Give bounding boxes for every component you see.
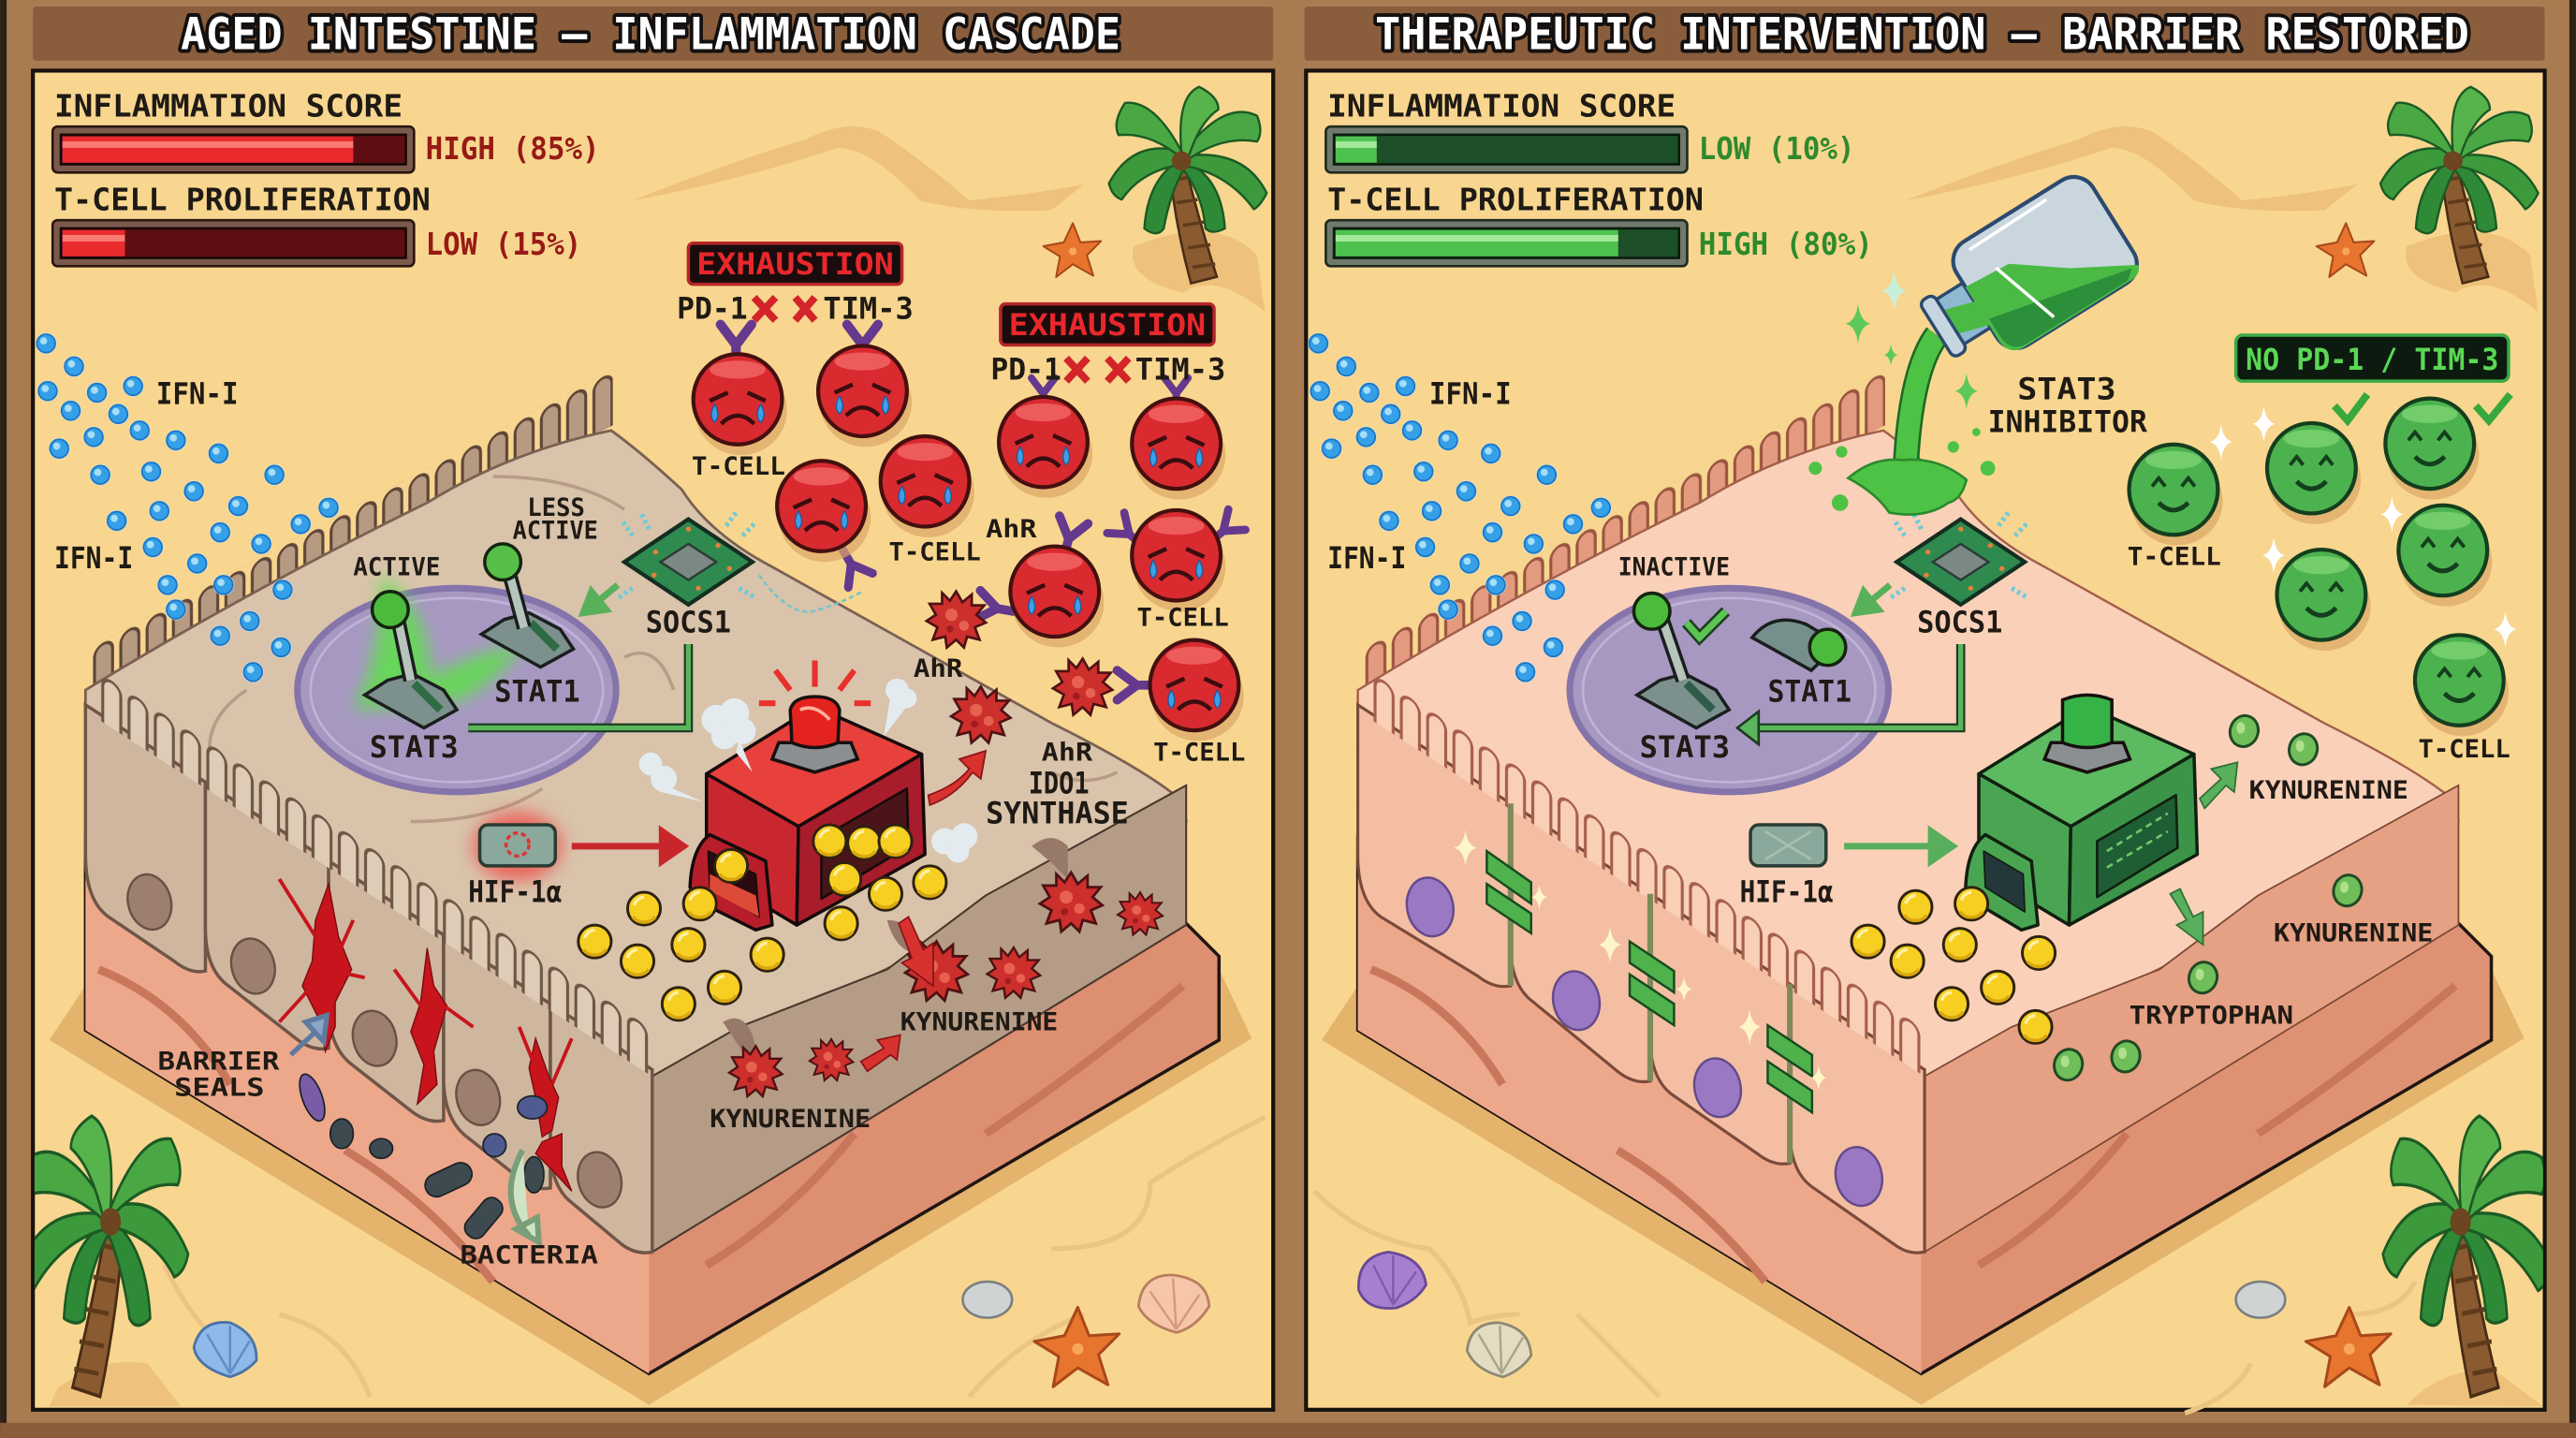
check mark (1687, 611, 1726, 638)
heading bar: aged intestine: AGED INTESTINE – INFLAMMATION CASCADE (181, 9, 1120, 61)
inhibitor bottle (1904, 169, 2145, 382)
labels left: T-CELL (1137, 605, 1229, 633)
kynurenine spikes (729, 873, 1163, 1096)
labels left: BARRIER (158, 1049, 280, 1077)
shell beige (1467, 1323, 1531, 1377)
red synthase machine (690, 707, 925, 930)
output arrows right (2170, 762, 2237, 945)
shell blue (194, 1322, 256, 1377)
T-cell proliferation bar right: T-CELL PROLIFERATION (1327, 182, 1704, 218)
exhaustion badge 2 (1001, 304, 1214, 345)
lever STAT3 active (353, 575, 526, 727)
seal sparkles (1454, 829, 1826, 1091)
labels right: SOCS1 (1917, 607, 2002, 640)
labels right: IFN-I (1327, 542, 1406, 576)
barrier seals (1486, 851, 1812, 1112)
checkpoint labels 2: PD-1 (990, 353, 1061, 387)
T-cell proliferation bar right: HIGH (80%) (1699, 226, 1873, 262)
pale sparkle (1881, 271, 1907, 311)
labels left: IDO1 (1029, 768, 1090, 801)
labels left: STAT1 (494, 675, 580, 709)
bacteria (295, 1071, 547, 1242)
checkpoint labels 1: TIM-3 (823, 292, 914, 326)
panel: aged intestine (19, 5, 1275, 1410)
labels left: HIF-1α (468, 876, 562, 910)
palm tree bottom (19, 1116, 188, 1397)
output arrows (861, 751, 986, 1071)
rock grey (963, 1282, 1012, 1318)
labels right: KYNURENINE (2274, 920, 2433, 948)
labels right: STAT3 (1640, 731, 1730, 765)
check marks (2334, 394, 2510, 420)
lever STAT1 off (1752, 620, 1846, 670)
labels left: SEALS (174, 1075, 265, 1103)
labels left: T-CELL (692, 453, 785, 481)
palm tree top (1109, 87, 1266, 284)
inflammation score bar: HIGH (85%) (426, 130, 600, 167)
check mark inner (1687, 611, 1726, 638)
signal line right (1759, 644, 1961, 727)
no PD-1 badge (2236, 335, 2509, 381)
labels right: T-CELL (2418, 736, 2510, 764)
T-cell proliferation bar: T-CELL PROLIFERATION (54, 182, 431, 218)
labels left: AhR (986, 516, 1037, 544)
starfish top right (2317, 223, 2374, 277)
AhR spikes (927, 592, 1112, 742)
labels right: INACTIVE (1618, 553, 1730, 581)
inflammation score bar right: LOW (10%) (1699, 130, 1854, 167)
interferon particles (36, 332, 340, 682)
labels left: SOCS1 (646, 607, 731, 640)
shell purple (1358, 1252, 1426, 1308)
labels left: STAT3 (370, 731, 459, 765)
top surface right (1358, 431, 2458, 1084)
labels left: T-CELL (889, 538, 981, 566)
labels right: STAT3 (2017, 373, 2116, 406)
green sparkles (1845, 304, 1978, 409)
smoke puffs (639, 679, 977, 862)
villi back (91, 370, 613, 703)
HIF-1a chip (474, 812, 562, 881)
green siren (2044, 695, 2130, 772)
no PD-1 badge: NO PD-1 / TIM-3 (2246, 344, 2498, 377)
checkpoint labels 1 (677, 292, 914, 326)
healthy T-cells (2130, 399, 2509, 736)
signal arrow (583, 585, 618, 613)
heading bar: therapeutic: THERAPEUTIC INTERVENTION – BARRIER RESTORED (1375, 9, 2469, 61)
sand background right (1306, 70, 2545, 1413)
arrow to machine (572, 831, 683, 861)
lever STAT1 less active (481, 544, 574, 668)
base layer (85, 838, 1219, 1373)
labels right: KYNURENINE (2249, 777, 2408, 805)
STAT platform right (1570, 588, 1888, 792)
labels left (54, 378, 1245, 1270)
checkpoint labels 1: PD-1 (677, 292, 748, 326)
T-cell proliferation bar (52, 182, 581, 266)
checkpoint labels 2 (990, 353, 1225, 387)
starfish bottom right (2305, 1307, 2391, 1387)
alarm siren (759, 661, 871, 772)
healthy block (1308, 332, 2525, 1405)
wavy leak line (759, 575, 862, 611)
starfish top (1044, 223, 1101, 277)
T-cell proliferation bar right (1325, 182, 1873, 266)
palm tree top right (2380, 87, 2539, 284)
tryptophan coins (578, 825, 946, 1020)
bacteria arrow (511, 1151, 539, 1242)
inflammation score bar right (1325, 88, 1854, 172)
sand background (33, 70, 1273, 1410)
palm tree bottom right (2383, 1116, 2552, 1397)
exhaustion badge 2: EXHAUSTION (1009, 309, 1206, 343)
right face right (1925, 785, 2458, 1252)
villi front (98, 670, 651, 1076)
interferon particles right (1308, 332, 1612, 682)
shell pink (1138, 1275, 1209, 1332)
exhausted T-cells (694, 345, 1244, 741)
HIF chip right (1750, 825, 1826, 866)
labels left: AhR (914, 655, 963, 683)
labels right: T-CELL (2128, 544, 2221, 572)
line arrowhead (1737, 712, 1759, 744)
starfish bottom (1034, 1307, 1120, 1387)
green machine (1966, 707, 2197, 930)
SOCS1 chip (618, 513, 755, 605)
white sparkles (2210, 405, 2517, 647)
labels left: LESS (527, 494, 585, 522)
intestinal block (50, 370, 1251, 1405)
labels right (1327, 373, 2510, 1030)
villi front right (1371, 670, 1923, 1076)
labels left: IFN-I (156, 378, 239, 412)
coins right (1852, 888, 2056, 1043)
labels right: IFN-I (1429, 378, 1512, 412)
green pellets (2050, 712, 2365, 1084)
STAT platform (298, 588, 616, 792)
inflammation score bar: INFLAMMATION SCORE (54, 88, 402, 125)
labels right: TRYPTOPHAN (2130, 1002, 2293, 1030)
tight junction lines (1511, 803, 1790, 1164)
labels left: BACTERIA (460, 1242, 598, 1270)
signal line (468, 644, 688, 727)
labels right: STAT1 (1767, 675, 1852, 709)
labels left: T-CELL (1153, 740, 1245, 768)
brown mounds (723, 838, 1068, 1060)
signal arrow right (1855, 585, 1890, 613)
labels left: AhR (1042, 740, 1092, 768)
inflammation score bar right: INFLAMMATION SCORE (1327, 88, 1676, 125)
lever STAT3 inactive (1633, 594, 1729, 727)
T-cell proliferation bar: LOW (15%) (426, 226, 581, 262)
healthy cells (1358, 705, 1925, 1253)
cells (85, 705, 652, 1253)
panel: therapeutic intervention (1303, 5, 2552, 1413)
seal arrow (291, 1016, 327, 1055)
exhaustion badge 1: EXHAUSTION (696, 248, 894, 282)
inflammation score bar (52, 88, 600, 172)
labels left: SYNTHASE (986, 797, 1129, 830)
receptors on exhausted cells (721, 325, 1246, 700)
stream and puddle (1808, 335, 1996, 515)
arrow to green machine (1844, 831, 1953, 861)
labels left: IFN-I (54, 542, 133, 576)
labels left: KYNURENINE (710, 1106, 871, 1134)
labels left: ACTIVE (513, 518, 598, 546)
checkpoint labels 2: TIM-3 (1135, 353, 1225, 387)
labels right: INHIBITOR (1988, 406, 2148, 440)
barrier cracks (279, 879, 572, 1191)
labels right: HIF-1α (1740, 876, 1834, 910)
villi back right (1363, 370, 1885, 703)
SOCS1 chip right (1890, 513, 2028, 605)
cell nuclei (122, 870, 627, 1212)
healthy nuclei (1401, 873, 1887, 1211)
right face (652, 785, 1186, 1252)
rock grey right (2236, 1282, 2285, 1318)
labels left: ACTIVE (353, 553, 440, 581)
exhaustion badge 1 (688, 243, 902, 285)
top surface (85, 431, 1186, 1084)
base layer right (1358, 838, 2492, 1373)
labels left: KYNURENINE (900, 1008, 1058, 1036)
